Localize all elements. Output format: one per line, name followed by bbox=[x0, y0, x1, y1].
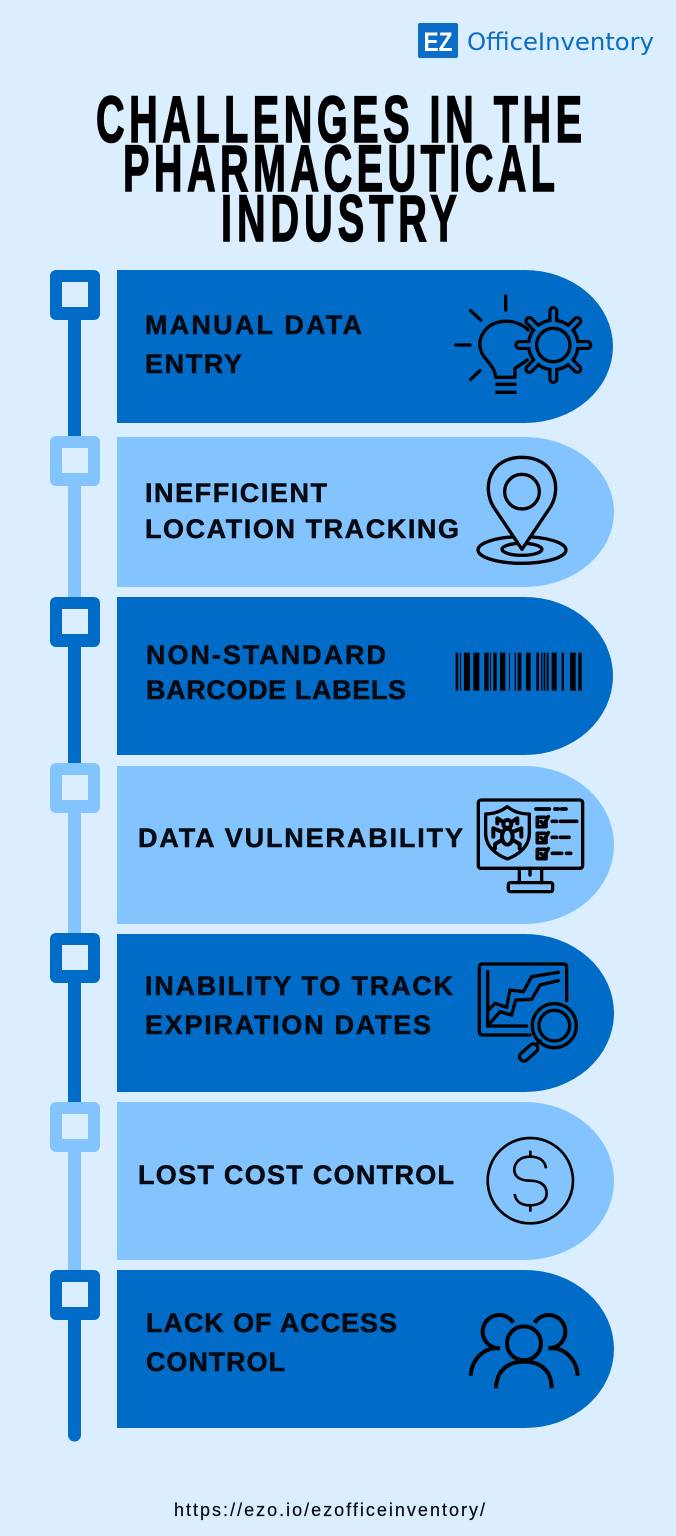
panel: non-standard barcode labels: NON-STANDARD bbox=[146, 640, 386, 670]
panel: lack of access control: CONTROL bbox=[146, 1347, 285, 1377]
icon: dollar coin bbox=[488, 1138, 573, 1223]
panel: lost cost control: LOST COST CONTROL bbox=[138, 1160, 454, 1190]
title bbox=[96, 83, 582, 256]
panel: inefficient location tracking bbox=[117, 437, 614, 587]
panel: manual data entry: ENTRY bbox=[145, 349, 242, 379]
footer url: https://ezo.io/ezofficeinventory/ bbox=[174, 1500, 485, 1520]
panel: non-standard barcode labels: BARCODE LABELS bbox=[146, 675, 406, 705]
panel: non-standard barcode labels bbox=[117, 597, 613, 755]
icon: monitor with shield bbox=[478, 800, 583, 892]
icon: lightbulb and gear bbox=[456, 296, 587, 392]
logo: EZ OfficeInventory: OfficeInventory bbox=[467, 28, 654, 56]
title: PHARMACEUTICAL bbox=[123, 132, 555, 206]
panel: inability to track expiration dates: EXPIRATION DATES bbox=[145, 1010, 431, 1040]
logo: EZ OfficeInventory bbox=[418, 23, 654, 58]
panel: lost cost control bbox=[117, 1102, 614, 1260]
panel: inefficient location tracking: LOCATION TRACKING bbox=[145, 514, 459, 544]
panel: manual data entry: MANUAL DATA bbox=[145, 310, 362, 340]
panel: data vulnerability bbox=[117, 766, 614, 924]
panel: data vulnerability: DATA VULNERABILITY bbox=[138, 823, 463, 853]
title: CHALLENGES IN THE bbox=[96, 83, 582, 157]
panel: lack of access control: LACK OF ACCESS bbox=[146, 1308, 397, 1338]
panel: inefficient location tracking: INEFFICIENT bbox=[145, 478, 328, 508]
title: INDUSTRY bbox=[221, 182, 457, 256]
logo: EZ OfficeInventory: EZ bbox=[424, 27, 452, 57]
timeline bbox=[50, 270, 100, 1442]
panel: lack of access control bbox=[117, 1270, 614, 1428]
panel: manual data entry bbox=[117, 270, 613, 423]
icon: barcode bbox=[456, 653, 582, 691]
panel: inability to track expiration dates: INABILITY TO TRACK bbox=[145, 971, 454, 1001]
icon: location pin bbox=[478, 457, 566, 563]
icon: chart with magnifier bbox=[479, 964, 576, 1057]
icon: group of people bbox=[471, 1315, 578, 1388]
panel: inability to track expiration dates bbox=[117, 934, 614, 1092]
